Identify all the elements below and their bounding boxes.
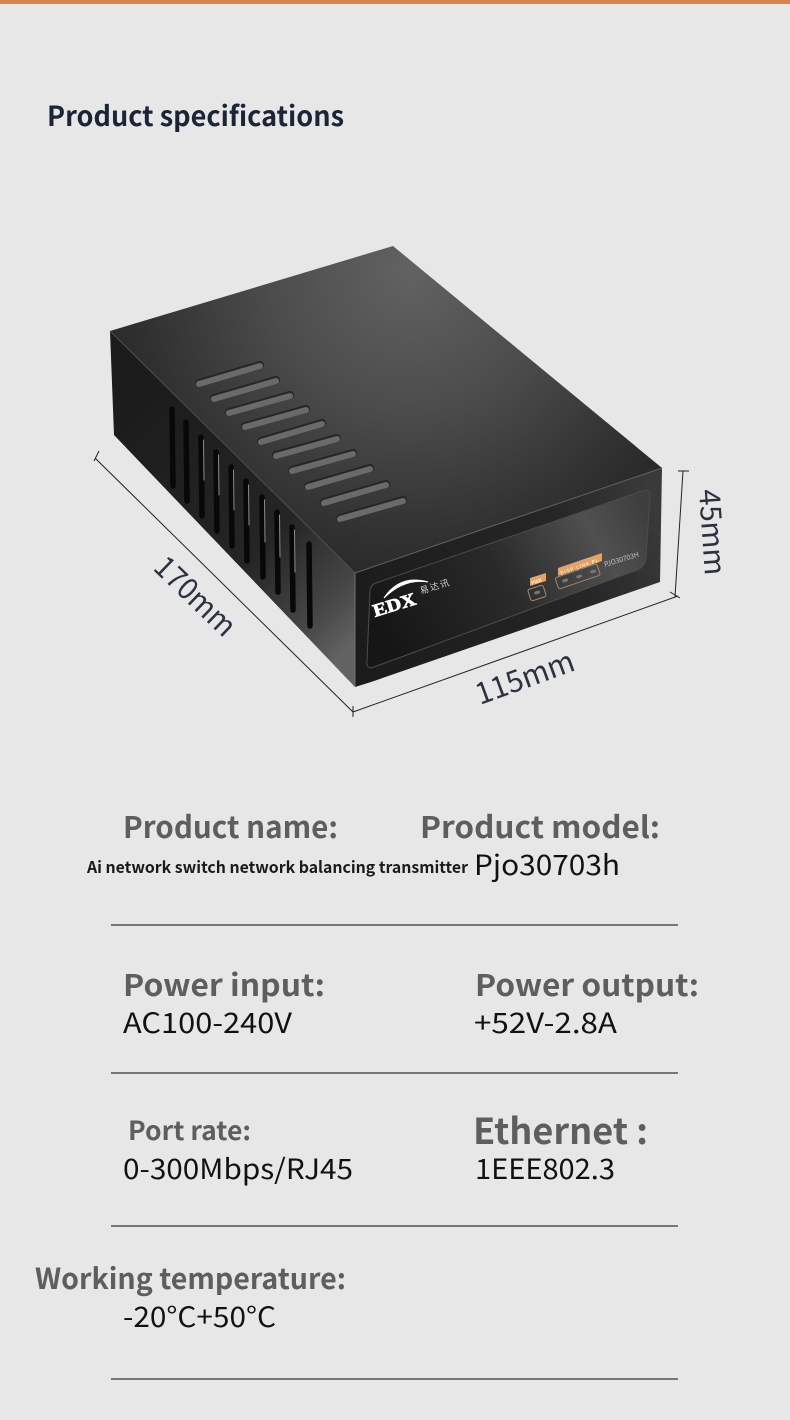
dimension: width 115mm: 115mm: [468, 637, 580, 713]
dimension: length 170mm: 170mm: [146, 544, 248, 645]
brand logo: [370, 576, 451, 621]
product image: network switch box: [110, 246, 662, 687]
spec: power input: Power input:: [123, 961, 325, 1005]
side vent slots: [172, 409, 310, 626]
spec: product name: Ai network switch network balancing transmitter: [86, 854, 468, 878]
brand logo: 易达讯: [418, 576, 451, 597]
dimension: height 45mm: [675, 471, 738, 597]
dimension: height 45mm: 45mm: [690, 488, 738, 576]
spec: power output: [474, 961, 699, 1042]
dimension: length 170mm: [94, 451, 353, 717]
spec: port rate: Port rate:: [128, 1111, 251, 1148]
spec: working temperature: -20°C+50°C: [123, 1296, 276, 1336]
spec: ethernet: 1EEE802.3: [475, 1148, 615, 1188]
brand logo: EDX: [370, 589, 418, 621]
spec: product name: [86, 803, 468, 878]
left side face: [110, 331, 355, 687]
spec: product model: Pjo30703h: [474, 844, 620, 884]
spec: product model: Product model:: [420, 803, 660, 847]
top accent bar: [0, 0, 790, 4]
spec: power output: +52V-2.8A: [474, 1002, 617, 1042]
spec: product name: Product name:: [123, 803, 338, 847]
spec: working temperature: Working temperature:: [35, 1256, 346, 1298]
title: Product specifications: [47, 94, 344, 134]
model label on panel: PJO30703H: [603, 550, 640, 570]
top face: [110, 246, 662, 573]
PWR indicator: PWR: [530, 577, 544, 587]
front face: [355, 468, 662, 687]
spec: ethernet: Ethernet :: [473, 1103, 648, 1155]
front panel: [367, 490, 650, 668]
spec: port rate: [123, 1111, 353, 1188]
spec: power input: AC100-240V: [123, 1002, 293, 1042]
spec: ethernet: [473, 1103, 648, 1188]
spec: port rate: 0-300Mbps/RJ45: [123, 1148, 353, 1188]
edge highlights: [110, 331, 662, 687]
spec: power input: [123, 961, 325, 1042]
dimension: width 115mm: [353, 592, 680, 713]
spec: working temperature: [35, 1256, 346, 1336]
spec: product model: [420, 803, 660, 884]
top vent slots: [199, 365, 403, 519]
PWR indicator: [528, 573, 546, 601]
status indicators: [555, 553, 602, 589]
spec: power output: Power output:: [475, 961, 699, 1005]
status indicators: DISP LINK PL: [559, 557, 600, 577]
